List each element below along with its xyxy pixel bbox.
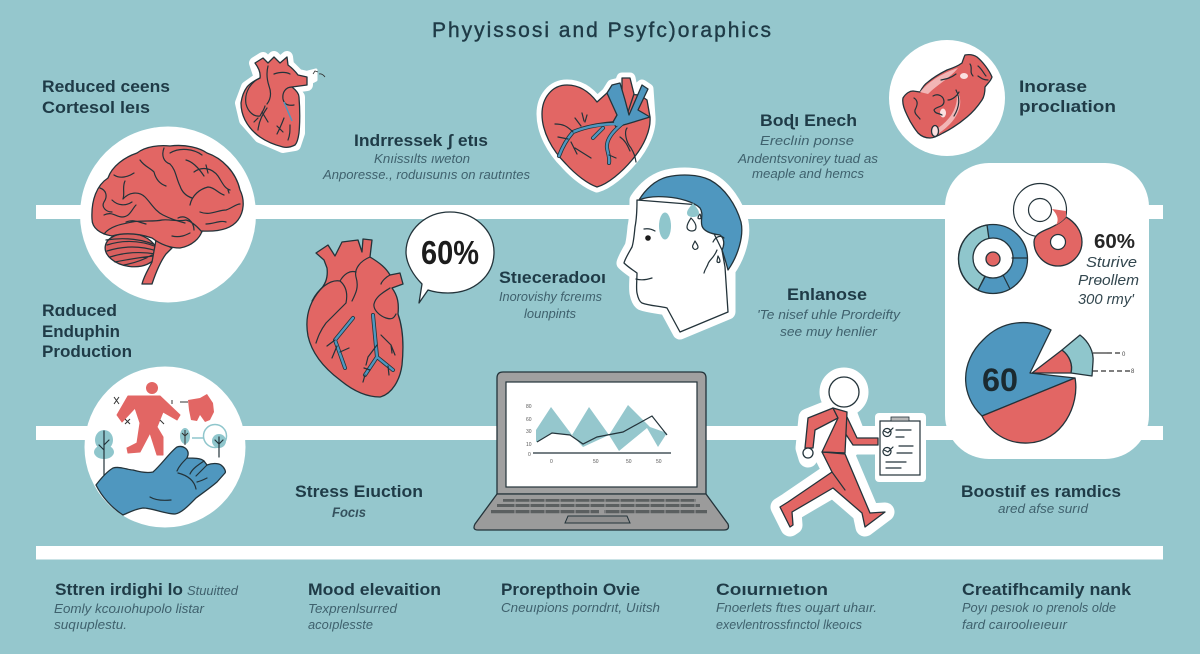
text: creativity: Creatifhcamily nank <box>962 580 1132 599</box>
small red organ <box>188 394 214 422</box>
text: cournition: exevlentrossfınctol lkeoıcs <box>716 618 862 632</box>
text: increased levels <box>322 131 530 182</box>
text: stress reduction <box>295 482 423 520</box>
text: body effect: Ereclıin ponse <box>760 134 854 148</box>
text: reduced endorphin: Production <box>42 342 132 361</box>
text: reduced cortisol <box>42 77 170 117</box>
line chart: 50 <box>656 459 662 465</box>
text: mood elevation <box>308 580 441 632</box>
text: proportion: Prorepthoin Ovie <box>501 580 640 599</box>
text: reduced endorphin: Rɑduced <box>42 301 117 320</box>
line chart: 80 <box>526 404 532 410</box>
text: enhance: see muy henlier <box>780 325 878 339</box>
text: strength <box>54 580 239 632</box>
text: increased levels: Knıissılts ıweton <box>374 152 470 166</box>
line chart: 50 <box>593 459 599 465</box>
line chart: 50 <box>626 459 632 465</box>
panel: statistics <box>945 163 1149 459</box>
line chart: 60 <box>526 417 532 423</box>
icon: head profile <box>624 175 742 332</box>
text: 60% survive <box>1078 231 1139 308</box>
text: body effect: Andentsvonirey tuad as <box>737 152 878 166</box>
text: reduced cortisol: Reduced ceens <box>42 77 170 96</box>
text: increase production: Inorase <box>1019 77 1087 96</box>
text: reduced cortisol: Cortesol leıs <box>42 98 150 117</box>
text: body effect <box>737 111 878 181</box>
icon: large heart <box>307 239 403 397</box>
text: increased levels: Anporesse., roduısunıs on rautıntes <box>322 168 530 182</box>
tree and bubble right <box>180 424 226 457</box>
text: body effect: meaple and hemcs <box>752 167 864 181</box>
icon: valentine heart with vessels <box>542 78 650 187</box>
line chart <box>526 404 671 465</box>
icon: brain <box>80 126 256 302</box>
text: cournition: Fnoerlets ftıes ouɟart uhaır. <box>716 601 877 615</box>
text: enhance: Enlanose <box>787 285 867 304</box>
text: boost <box>961 482 1121 516</box>
chart: pie: 0 <box>1122 352 1126 358</box>
line chart: 0 <box>528 452 531 458</box>
runner body <box>805 408 838 448</box>
text: increased levels: Indrressek ʃ etıs <box>354 131 488 150</box>
chart: blue donut <box>958 224 1028 294</box>
text: 60% survive: Prɵollem <box>1078 272 1139 289</box>
text: mood elevation: acoıplesste <box>308 618 373 632</box>
text: stress reduction: Stress Eıuction <box>295 482 423 501</box>
line chart: 10 <box>526 442 532 448</box>
text: steroid effect <box>499 268 606 321</box>
clipboard <box>880 417 920 475</box>
text: boost: Boostıif es ramdics <box>961 482 1121 501</box>
chart: rings <box>1014 184 1082 266</box>
text: steroid effect: Stıeceradooı <box>499 268 606 287</box>
chart: pie: 8 <box>1131 369 1135 375</box>
text: creativity <box>962 580 1132 632</box>
icon: runner with checklist <box>780 377 926 527</box>
text: reduced endorphin <box>42 301 132 361</box>
text: increase production: proclıation <box>1019 97 1116 116</box>
text: enhance: 'Te nisef uhle Prordeifty <box>757 308 901 322</box>
text: reduced endorphin: Enduphin <box>42 322 120 341</box>
text: cournition: Coıurnıetıon <box>716 580 828 599</box>
icon: laptop with chart <box>474 372 728 530</box>
text: increase production <box>1019 77 1116 116</box>
blue hand <box>96 446 225 515</box>
line chart: 0 <box>550 459 553 465</box>
text: strength: suqıuplestu. <box>54 618 127 632</box>
text: 60% survive: 60% <box>1094 231 1135 253</box>
text: 60% survive: 300 rmy' <box>1078 291 1135 308</box>
icon: hand with figure <box>84 366 246 528</box>
text: steroid effect: Inorovishy fcreıms <box>499 290 602 304</box>
text: enhance <box>757 285 901 339</box>
keyboard <box>491 499 707 513</box>
callout: 60% speech bubble <box>406 212 494 303</box>
text: proportion: Cneuıpions porndrıt, Uıitsh <box>501 601 660 615</box>
text: steroid effect: lounpints <box>524 307 576 321</box>
text: 60% survive: Sturive <box>1086 254 1137 271</box>
text: mood elevation: Texprenlsurred <box>308 602 398 616</box>
chart: pie: 60 <box>982 362 1018 398</box>
text: boost: ared afse surıd <box>998 502 1089 516</box>
chart: pie <box>966 323 1135 443</box>
text: strength: Stuuitted <box>187 584 239 598</box>
icon: gland organ <box>889 40 1005 156</box>
text: proportion <box>501 580 660 615</box>
icon: small heart <box>241 57 325 147</box>
tree left <box>94 430 114 481</box>
line chart: 30 <box>526 429 532 435</box>
figure <box>117 382 180 455</box>
text: mood elevation: Mood elevaition <box>308 580 441 599</box>
text: body effect: Boɖı Enech <box>760 111 857 130</box>
text: strength: Sttren irdighi lo <box>55 580 183 599</box>
title: Phyyissosi and Psyfc)oraphics <box>432 19 771 42</box>
text: strength: Eomly kcoɹıohupolo listar <box>54 602 205 616</box>
text: creativity: Poyı pesıok ıo prenols olde <box>962 601 1116 615</box>
text: stress reduction: Focıs <box>332 504 366 520</box>
callout: 60% speech bubble: 60% <box>421 234 479 271</box>
text: cournition <box>716 580 877 632</box>
text: creativity: fard caıroolıeıeuır <box>962 618 1068 632</box>
